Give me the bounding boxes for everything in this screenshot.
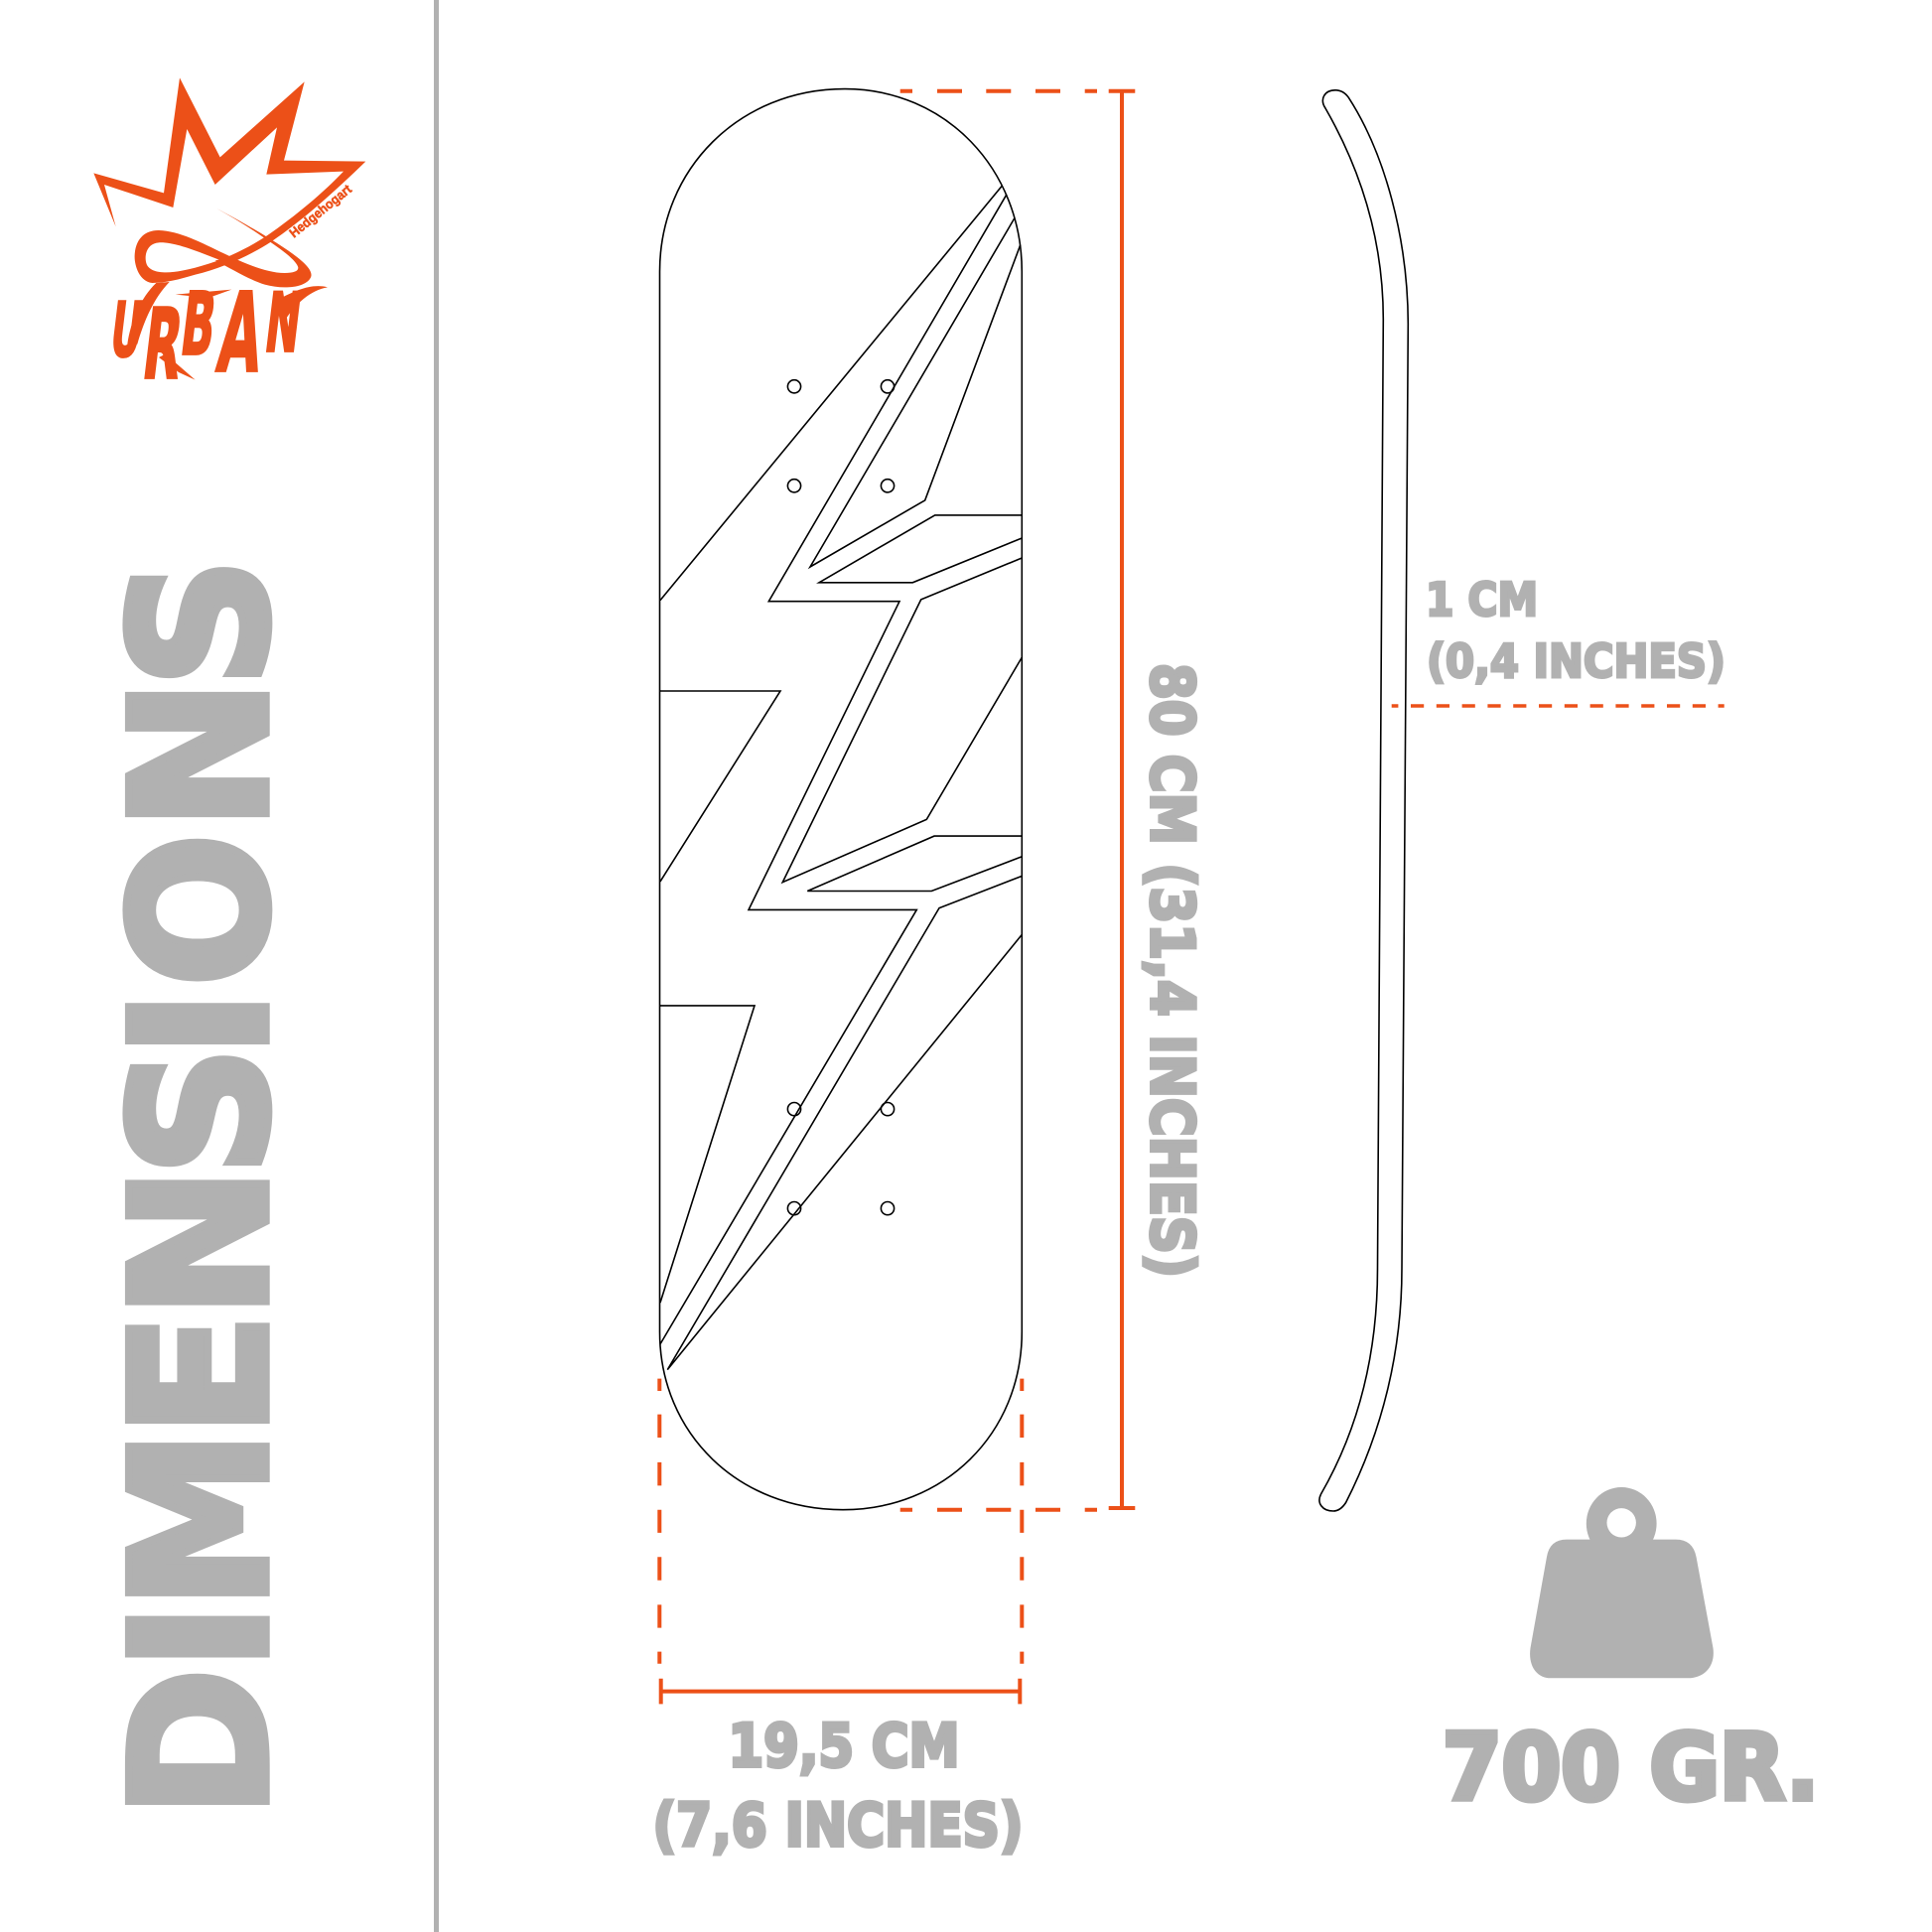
lightning bolt artwork [660, 186, 1022, 1370]
logo: Urban Hedgehogart [93, 77, 365, 402]
logo wordmark: URBAN: A [212, 269, 270, 397]
title: DIMENSIONS: DIMENSIONS [91, 558, 311, 1818]
width label: 19,5 CM [729, 1712, 959, 1781]
width measure line [659, 1379, 1022, 1704]
icon: weight [1530, 1487, 1714, 1678]
thickness measure line [1392, 704, 1725, 708]
height measure line [900, 91, 1135, 1510]
width label [653, 1712, 1023, 1861]
logo wordmark: URBAN: R [138, 289, 189, 402]
thickness label: (0,4 INCHES) [1427, 634, 1725, 688]
logo signature: Hedgehogart: Hedgehogart [286, 182, 354, 240]
skateboard deck side profile [1319, 90, 1408, 1511]
logo wordmark: URBAN: B [176, 275, 221, 375]
logo wordmark: URBAN: N [261, 277, 306, 370]
weight label: 700 GR. [1443, 1715, 1819, 1821]
vertical divider [434, 0, 439, 1932]
truck bolt holes [787, 380, 895, 1215]
skateboard deck front view [659, 89, 1022, 1510]
width label: (7,6 INCHES) [653, 1791, 1023, 1861]
height label: 80 CM (31,4 INCHES) [1137, 663, 1206, 1278]
thickness label [1426, 573, 1725, 688]
logo infinity right loop [215, 208, 312, 287]
logo crown and infinity left loop [93, 77, 365, 283]
thickness label: 1 CM [1426, 573, 1538, 626]
logo swashes [127, 282, 328, 380]
logo wordmark: URBAN: U [106, 287, 147, 374]
deck outline [659, 89, 1022, 1510]
